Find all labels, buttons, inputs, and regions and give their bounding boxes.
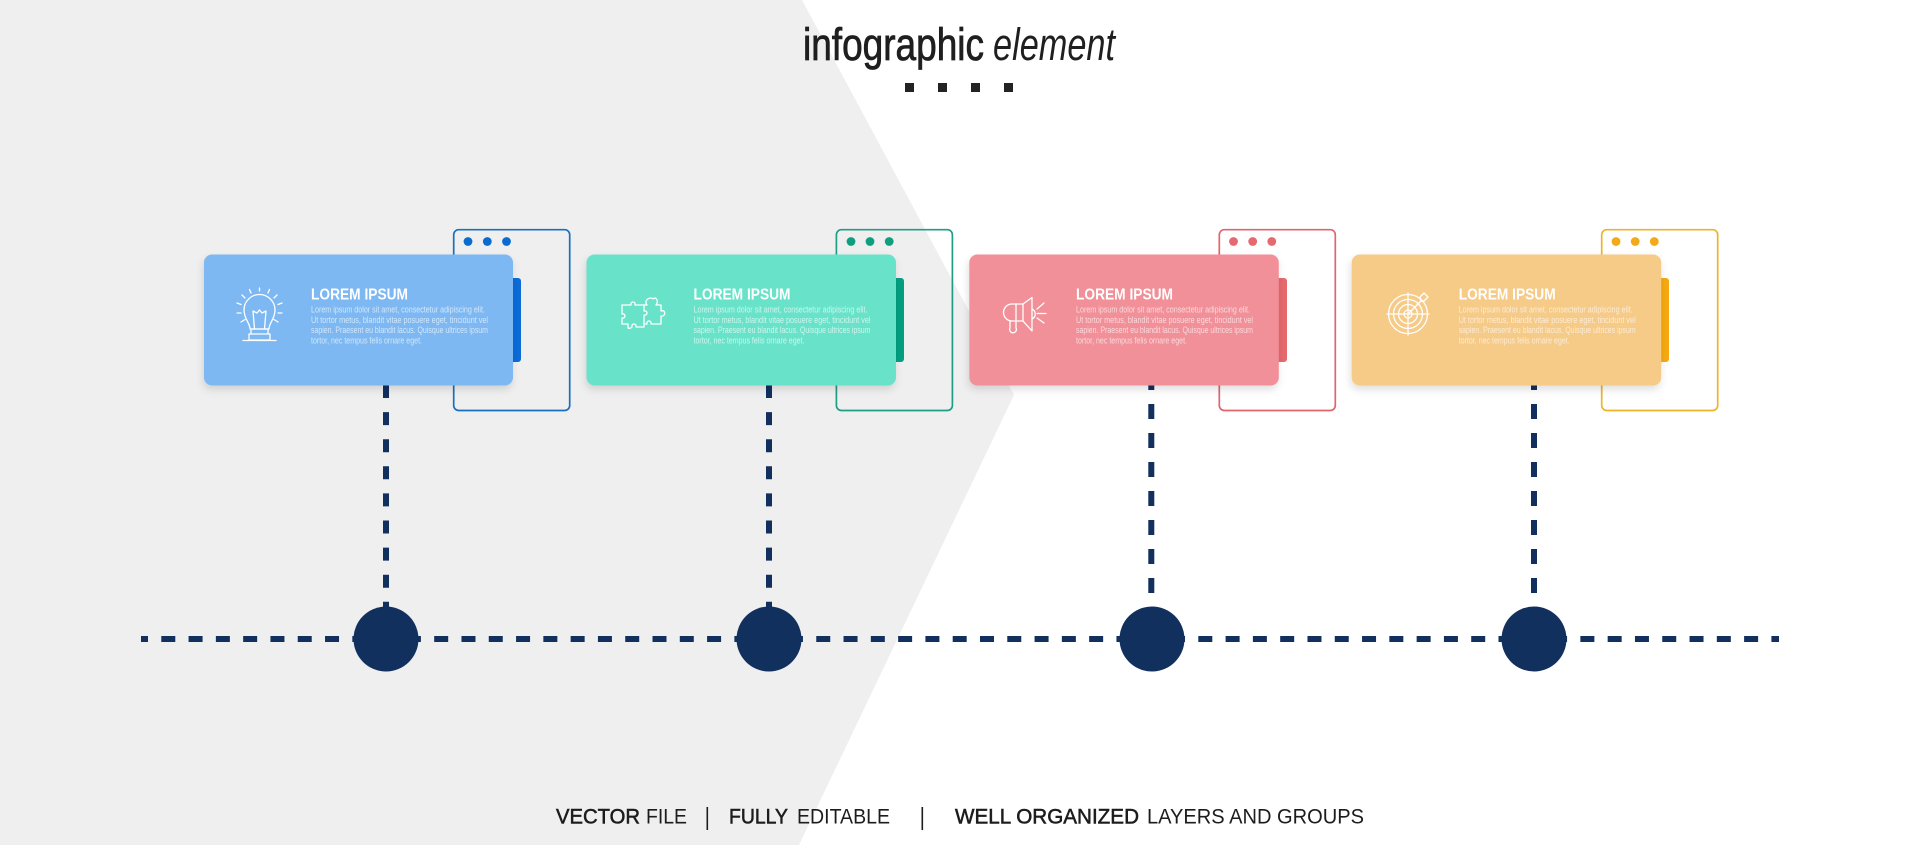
- icon: puzzle pieces: [622, 298, 665, 328]
- card 1: [204, 254, 513, 386]
- card text 4: [1459, 286, 1636, 346]
- card text 1: tortor, nec tempus felis ornare eget.: [311, 336, 422, 346]
- card text 4: Ut tortor metus, blandit vitae posuere eget, tincidunt vel: [1459, 315, 1636, 325]
- footer text: WELL ORGANIZED: [955, 804, 1139, 828]
- window outline 3: [1219, 230, 1335, 410]
- background arrow panel: [0, 0, 1014, 845]
- card text 3: [1076, 286, 1253, 346]
- card text 1: LOREM IPSUM: [311, 286, 408, 304]
- card text 4: tortor, nec tempus felis ornare eget.: [1459, 336, 1570, 346]
- footer text: FILE: [646, 804, 687, 828]
- footer text: FULLY: [729, 804, 788, 828]
- connector 3: [1148, 375, 1154, 610]
- step 1: [204, 230, 570, 671]
- card text 4: Lorem ipsum dolor sit amet, consectetur adipiscing elit.: [1459, 304, 1633, 314]
- connector 1: [383, 385, 389, 610]
- node 1: [354, 606, 418, 672]
- side tab 2: [888, 278, 904, 362]
- connector 4: [1531, 375, 1537, 610]
- title square markers: [905, 83, 1013, 92]
- side tab 3: [1271, 278, 1287, 362]
- icon: light bulb: [237, 288, 282, 340]
- step 4: [1352, 230, 1718, 671]
- card text 1: Ut tortor metus, blandit vitae posuere eget, tincidunt vel: [311, 315, 488, 325]
- side tab 4: [1653, 278, 1669, 362]
- icon: target with arrow: [1387, 293, 1429, 335]
- connector 2: [766, 385, 772, 610]
- card text 2: Ut tortor metus, blandit vitae posuere eget, tincidunt vel: [694, 315, 870, 325]
- window dots 2: [847, 237, 894, 246]
- window dots 1: [464, 237, 511, 246]
- footer text: VECTOR: [556, 804, 640, 828]
- node 4: [1502, 606, 1566, 672]
- card text 3: tortor, nec tempus felis ornare eget.: [1076, 336, 1187, 346]
- card text 3: LOREM IPSUM: [1076, 286, 1173, 304]
- card 3: [969, 254, 1279, 386]
- timeline dashed line: [141, 636, 1779, 642]
- card text 1: Lorem ipsum dolor sit amet, consectetur adipiscing elit.: [311, 304, 485, 314]
- card text 2: Lorem ipsum dolor sit amet, consectetur adipiscing elit.: [694, 304, 868, 314]
- window dots 4: [1612, 237, 1659, 246]
- node 2: [736, 606, 802, 672]
- window outline 2: [836, 230, 952, 410]
- step 3: [969, 230, 1335, 671]
- card text 2: tortor, nec tempus felis ornare eget.: [694, 336, 804, 346]
- card text 2: sapien. Praesent eu blandit lacus. Quisque ultrices ipsum: [694, 325, 870, 335]
- card 2: [586, 254, 896, 386]
- card text 2: LOREM IPSUM: [694, 286, 790, 304]
- window dots 3: [1229, 237, 1276, 246]
- card text 1: [311, 286, 488, 346]
- card text 3: Lorem ipsum dolor sit amet, consectetur adipiscing elit.: [1076, 304, 1250, 314]
- footer text: [556, 804, 1364, 830]
- card text 3: Ut tortor metus, blandit vitae posuere eget, tincidunt vel: [1076, 315, 1253, 325]
- side tab 1: [505, 278, 521, 362]
- title: infographic: [803, 19, 984, 70]
- card text 3: sapien. Praesent eu blandit lacus. Quisque ultrices ipsum: [1076, 325, 1253, 335]
- step 2: [586, 230, 952, 671]
- window outline 4: [1602, 230, 1718, 410]
- card 4: [1352, 254, 1661, 386]
- card text 4: LOREM IPSUM: [1459, 286, 1556, 304]
- title: element: [993, 19, 1117, 70]
- footer text: LAYERS AND GROUPS: [1147, 804, 1364, 828]
- node 3: [1120, 606, 1184, 672]
- card text 1: sapien. Praesent eu blandit lacus. Quisque ultrices ipsum: [311, 325, 488, 335]
- card text 4: sapien. Praesent eu blandit lacus. Quisque ultrices ipsum: [1459, 325, 1636, 335]
- window outline 1: [454, 230, 570, 410]
- icon: megaphone: [1004, 298, 1046, 333]
- footer text: EDITABLE: [797, 804, 890, 828]
- card text 2: [694, 286, 870, 346]
